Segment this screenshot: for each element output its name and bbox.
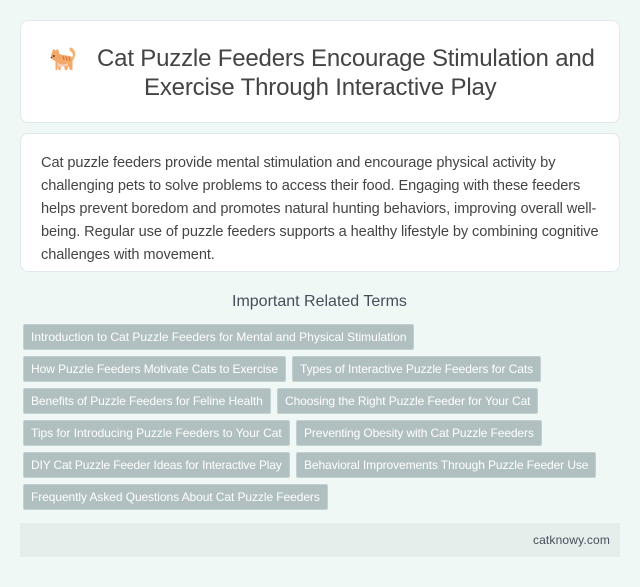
tag: Behavioral Improvements Through Puzzle Feeder Use xyxy=(304,458,588,472)
tag: Frequently Asked Questions About Cat Puzzle Feeders xyxy=(31,490,320,504)
tag xyxy=(23,420,290,446)
tag list xyxy=(23,324,596,510)
tag xyxy=(296,420,542,446)
summary card xyxy=(20,133,620,272)
title card xyxy=(20,20,620,123)
tag xyxy=(23,484,328,510)
summary text xyxy=(41,155,599,263)
footer source: catknowy.com xyxy=(533,533,610,547)
tag: Preventing Obesity with Cat Puzzle Feeders xyxy=(304,426,534,440)
summary text: challenging pets to solve problems to access their food. Engaging with these feeders xyxy=(41,178,580,194)
tag xyxy=(296,452,596,478)
tag: DIY Cat Puzzle Feeder Ideas for Interactive Play xyxy=(31,458,282,472)
summary text: being. Regular use of puzzle feeders supports a healthy lifestyle by combining cognitive xyxy=(41,224,599,240)
tag xyxy=(23,388,271,414)
summary text: helps prevent boredom and promotes natural hunting behaviors, improving overall well- xyxy=(41,201,596,217)
tag xyxy=(23,452,290,478)
icon: cat xyxy=(50,48,76,70)
tag: Choosing the Right Puzzle Feeder for Your Cat xyxy=(285,394,530,408)
tag: Tips for Introducing Puzzle Feeders to Your Cat xyxy=(31,426,282,440)
tag xyxy=(23,324,414,350)
tag xyxy=(292,356,541,382)
summary text: Cat puzzle feeders provide mental stimulation and encourage physical activity by xyxy=(41,155,555,171)
tag: Types of Interactive Puzzle Feeders for Cats xyxy=(300,362,533,376)
title line 1: Cat Puzzle Feeders Encourage Stimulation and xyxy=(97,45,595,72)
tag xyxy=(277,388,538,414)
tag: Introduction to Cat Puzzle Feeders for Mental and Physical Stimulation xyxy=(31,330,407,344)
footer bar xyxy=(20,523,620,557)
tag xyxy=(23,356,286,382)
title line 2: Exercise Through Interactive Play xyxy=(144,74,496,101)
summary text: challenges with movement. xyxy=(41,247,215,263)
related terms heading: Important Related Terms xyxy=(232,293,407,310)
tag: Benefits of Puzzle Feeders for Feline Health xyxy=(31,394,263,408)
tag: How Puzzle Feeders Motivate Cats to Exercise xyxy=(31,362,278,376)
